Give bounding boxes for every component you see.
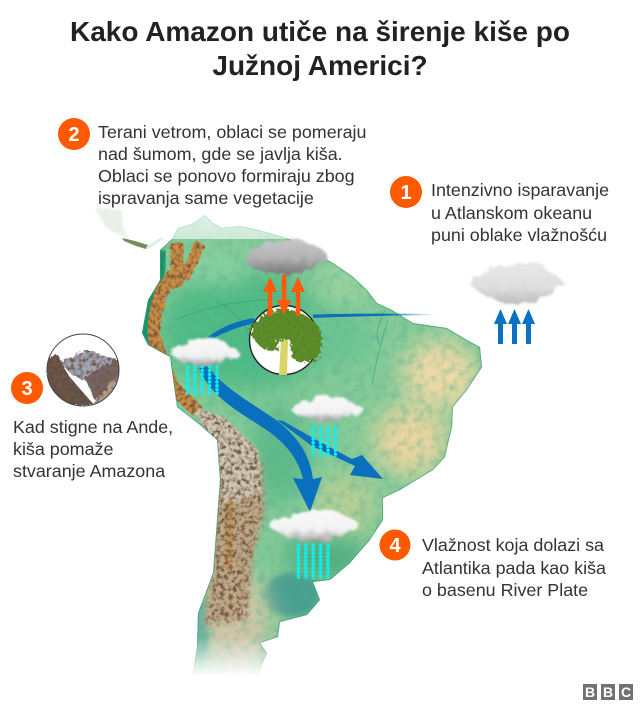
callout 3: kiša pomaže: [13, 439, 113, 459]
BBC logo: B: [603, 684, 613, 700]
rain: Andes: [185, 365, 221, 395]
arrow down: [277, 275, 291, 315]
icon: Andes photo: [47, 334, 119, 406]
title: [70, 16, 570, 81]
arrow up right: [291, 277, 305, 316]
callout 4: [380, 530, 606, 600]
title: Južnoj Americi?: [212, 50, 428, 81]
rain: River Plate: [295, 543, 331, 579]
terrain: Patagonian coast: [194, 596, 208, 668]
map: Central America fragment: [95, 208, 165, 249]
callout 4: 4: [389, 535, 401, 557]
terrain: Amazon basin: [160, 270, 330, 390]
terrain: texture: [164, 239, 482, 666]
terrain: pampas: [264, 573, 320, 617]
callout 2: Oblaci se ponovo formiraju zbog: [98, 166, 355, 186]
BBC logo: C: [621, 684, 631, 700]
callout 2: Terani vetrom, oblaci se pomeraju: [98, 122, 366, 142]
terrain: southern fade: [193, 638, 273, 675]
cloud: River Plate: [268, 510, 362, 542]
callout 2: nad šumom, gde se javlja kiša.: [98, 144, 343, 164]
callout 1: 1: [400, 182, 412, 204]
BBC logo: B: [585, 684, 595, 700]
terrain: Altiplano: [190, 405, 262, 505]
cloud: Atlantic: [469, 262, 564, 304]
terrain: central plains: [250, 407, 310, 503]
blue arrows: moisture flowing south: [199, 366, 383, 512]
callout 2: 2: [68, 124, 80, 146]
orange arrows: evapotranspiration: [263, 275, 305, 316]
cloud: Andes: [170, 338, 240, 366]
callout 4: o basenu River Plate: [422, 580, 588, 600]
callout 1: Intenzivno isparavanje: [431, 180, 609, 200]
callout 1: u Atlanskom okeanu: [431, 203, 592, 223]
callout 3: Kad stigne na Ande,: [13, 417, 173, 437]
terrain: northern Andes: [153, 243, 200, 411]
terrain: rivers: [175, 300, 388, 385]
map: South America relief: [142, 215, 482, 675]
arrow to south-east Brazil: [277, 420, 383, 479]
blue arrows: ocean evaporation: [494, 309, 535, 344]
callout 1: [390, 176, 609, 245]
terrain: eastern highlands: [402, 339, 478, 411]
terrain: Caribbean fade: [172, 215, 290, 239]
rain: central Amazon: [310, 425, 341, 457]
BBC logo: [583, 684, 633, 700]
terrain: central Andes orange core: [226, 500, 232, 570]
wind arrow: from Atlantic to tree: [313, 314, 435, 318]
terrain: central and southern Andes: [205, 450, 264, 625]
terrain: Patagonia: [202, 570, 270, 680]
callout 2: [58, 118, 366, 208]
callout 4: Atlantika pada kao kiša: [422, 558, 606, 578]
terrain: coast rim: [142, 215, 482, 675]
callout 3: [11, 372, 173, 481]
tree in circle: [250, 306, 322, 375]
callout 1: puni oblake vlažnošću: [431, 225, 607, 245]
cloud: central: [291, 396, 365, 422]
terrain: northern savanna: [190, 252, 250, 284]
arrow to River Plate: [199, 366, 322, 512]
callout 2: ispravanja same vegetacije: [98, 188, 314, 208]
callout 3: 3: [21, 378, 33, 400]
wind arrow: tree to Andes: [208, 318, 255, 339]
callout 4: Vlažnost koja dolazi sa: [422, 535, 604, 555]
arrow up left: [263, 277, 277, 316]
cloud: over Amazon (grey): [246, 238, 328, 275]
callout 3: stvaranje Amazona: [13, 461, 165, 481]
title: Kako Amazon utiče na širenje kiše po: [70, 16, 570, 47]
terrain: western coast: [143, 250, 162, 352]
